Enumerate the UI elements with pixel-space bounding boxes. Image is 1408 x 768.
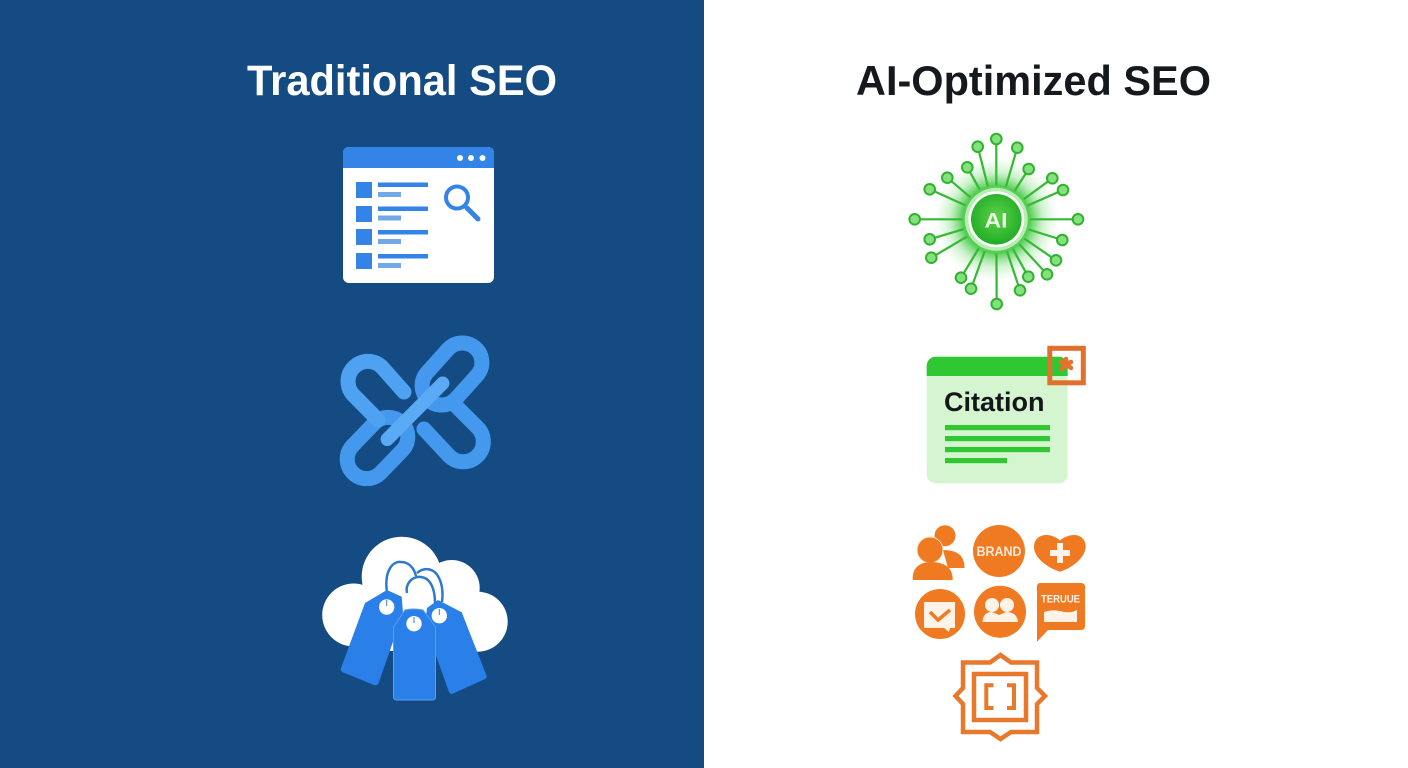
icon: AI network hub: AI bbox=[984, 210, 1008, 232]
icon: broken chain link bbox=[339, 335, 490, 487]
icon: framed brackets bbox=[956, 655, 1045, 739]
icon: message check bbox=[915, 589, 965, 639]
icon: testimonial speech bubble bbox=[1037, 583, 1085, 642]
panel: traditional SEO bbox=[0, 0, 704, 768]
tag: center bbox=[394, 609, 436, 700]
icon: testimonial speech bubble: TERUUE bbox=[1041, 594, 1080, 606]
icon: citation card: Citation bbox=[944, 387, 1044, 417]
icon: brand badge: BRAND bbox=[976, 544, 1022, 559]
tag: right bbox=[425, 600, 487, 694]
icon: heart with plus bbox=[1034, 535, 1086, 572]
icon: people group bbox=[913, 525, 965, 580]
heading: Traditional SEO: Traditional SEO bbox=[247, 58, 557, 105]
citation star badge bbox=[1050, 348, 1083, 383]
tag: left bbox=[341, 590, 403, 685]
icon: cloud with tags bbox=[322, 537, 508, 700]
icon: AI network hub bbox=[909, 134, 1083, 309]
icon: community circle bbox=[974, 586, 1026, 638]
icon: brand badge bbox=[973, 525, 1025, 577]
icon: citation card bbox=[927, 348, 1083, 483]
icon: search results browser window bbox=[343, 147, 494, 283]
panel: AI-optimized SEO bbox=[704, 0, 1408, 768]
heading: AI-Optimized SEO: AI-Optimized SEO bbox=[856, 57, 1211, 104]
